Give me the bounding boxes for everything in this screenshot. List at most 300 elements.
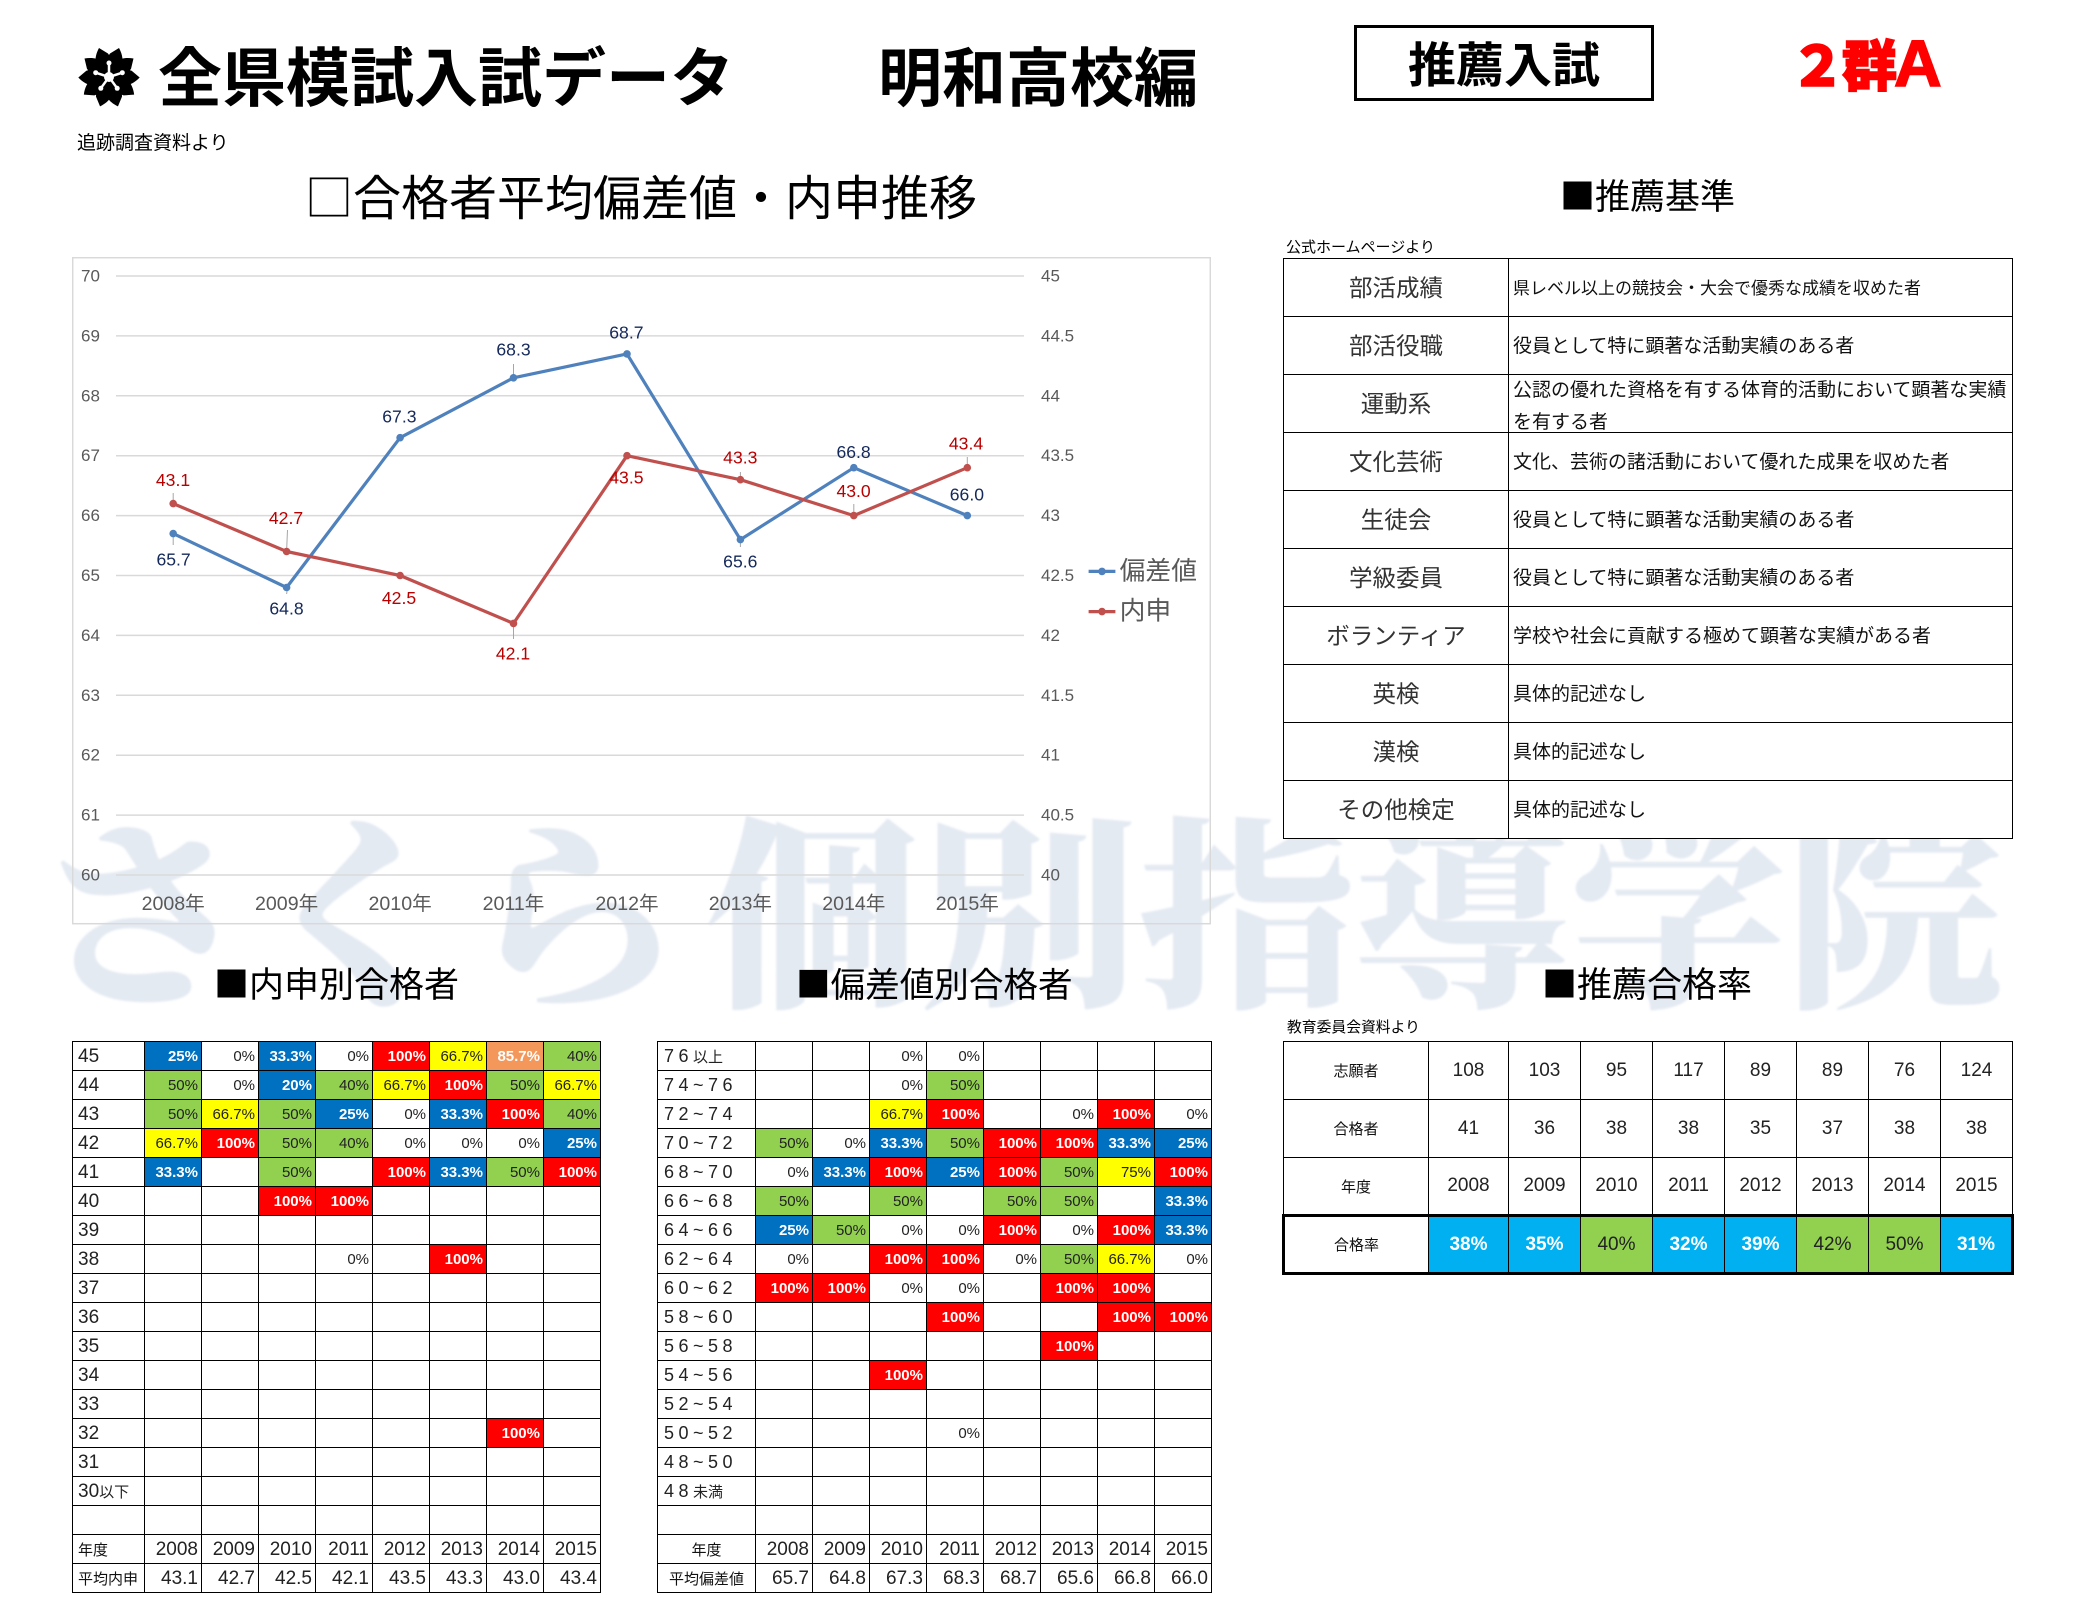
right axis labels: 43: [1041, 506, 1060, 525]
heatmap table: passers by naishin: 50%: [168, 1106, 198, 1122]
heatmap table: passers by deviation: 2009: [824, 1538, 866, 1560]
heatmap table: passers by deviation: 58~60: [664, 1307, 737, 1327]
heatmap table: passers by deviation: 100%: [1170, 1308, 1208, 1326]
heatmap table: passers by naishin: 34: [78, 1364, 99, 1386]
heatmap table: passers by deviation: 100%: [1113, 1222, 1151, 1238]
heatmap table: passers by deviation: 100%: [1056, 1134, 1094, 1152]
data labels: naishin: 43.4: [949, 434, 983, 454]
heatmap table: passers by naishin: 50%: [282, 1134, 312, 1152]
heatmap table: passers by naishin: 66.7%: [440, 1048, 483, 1064]
table: recommendation criteria: 英検: [1372, 675, 1420, 709]
table: recommendation criteria: 県レベル以上の競技会・大会で優秀な成績を収めた者: [1513, 274, 1921, 298]
heatmap table: passers by naishin: 20%: [282, 1076, 312, 1094]
table: recommendation criteria: 文化芸術: [1349, 443, 1443, 477]
table: recommendation criteria: 漢検: [1372, 733, 1420, 767]
heatmap table: passers by naishin: 2008: [156, 1538, 198, 1560]
heatmap table: passers by deviation: 0%: [901, 1048, 923, 1064]
heatmap table: passers by deviation: 62~64: [664, 1249, 737, 1269]
x axis labels: 2008年: [142, 893, 205, 915]
table: recommendation pass rate: 108: [1453, 1060, 1484, 1080]
heatmap table: passers by naishin: 0%: [404, 1134, 426, 1152]
heatmap table: passers by naishin: 0%: [233, 1076, 255, 1094]
heatmap table: passers by deviation: 64~66: [664, 1220, 737, 1240]
heatmap table: passers by deviation: 50%: [950, 1076, 980, 1094]
heatmap table: passers by deviation: 2015: [1166, 1538, 1208, 1560]
table: recommendation criteria: 役員として特に顕著な活動実績のある者: [1513, 562, 1854, 590]
legend: [1089, 556, 1197, 626]
heatmap table: passers by deviation: 65.6: [1057, 1568, 1094, 1588]
heatmap table: passers by naishin: 32: [78, 1422, 99, 1444]
left axis labels: 63: [81, 686, 100, 705]
data labels: deviation value: 68.3: [496, 340, 531, 360]
heatmap table: passers by naishin: 42.5: [275, 1568, 312, 1588]
table: recommendation pass rate: 35: [1750, 1118, 1771, 1138]
heatmap table: passers by naishin: 0%: [461, 1134, 483, 1152]
data labels: naishin: 43.0: [836, 481, 871, 501]
title: school name: 明和高校編: [878, 28, 1198, 120]
heatmap table: passers by naishin: 0%: [233, 1048, 255, 1064]
heatmap table: passers by naishin: 38: [78, 1248, 99, 1270]
heatmap table: passers by naishin: 25%: [339, 1106, 369, 1122]
heatmap table: passers by naishin: 66.7%: [554, 1076, 597, 1094]
heatmap table: passers by naishin: 100%: [502, 1106, 540, 1122]
heatmap table: passers by deviation: 100%: [942, 1308, 980, 1326]
data labels: naishin: 43.5: [609, 468, 644, 488]
heatmap table: passers by deviation: 50%: [1064, 1250, 1094, 1268]
heatmap table: passers by naishin: 0%: [347, 1250, 369, 1268]
heatmap table: passers by naishin: 36: [78, 1306, 99, 1328]
right axis labels: 43.5: [1041, 446, 1074, 465]
heatmap table: passers by deviation: 66.0: [1171, 1568, 1208, 1588]
heatmap table: passers by deviation: 54~56: [664, 1365, 737, 1385]
heatmap table: passers by deviation: 50%: [893, 1192, 923, 1210]
table: recommendation criteria: 具体的記述なし: [1513, 794, 1646, 822]
heatmap table: passers by deviation: 50%: [1064, 1164, 1094, 1180]
table: recommendation pass rate: 95: [1606, 1060, 1627, 1080]
table: recommendation criteria: [1283, 258, 2013, 839]
heading: recommendation pass rate: ■推薦合格率: [1542, 957, 1752, 1008]
right axis labels: 44.5: [1041, 326, 1074, 345]
heatmap table: passers by naishin: 33: [78, 1394, 99, 1414]
source note: official website: 公式ホームページより: [1286, 236, 1435, 257]
heatmap table: passers by deviation: 66.7%: [880, 1106, 923, 1122]
heatmap table: passers by naishin: 44: [78, 1074, 99, 1096]
heatmap table: passers by deviation: 100%: [942, 1106, 980, 1122]
heatmap table: passers by deviation: 0%: [958, 1222, 980, 1238]
heatmap table: passers by naishin: [72, 1041, 601, 1593]
heading: average trend: □合格者平均偏差値・内申推移: [305, 159, 977, 229]
table: recommendation criteria: 部活成績: [1349, 269, 1443, 303]
heatmap table: passers by deviation: 66.7%: [1108, 1250, 1151, 1268]
heatmap table: passers by deviation: 0%: [844, 1134, 866, 1152]
heatmap table: passers by naishin: 40%: [567, 1048, 597, 1064]
table: recommendation pass rate: 2011: [1668, 1175, 1709, 1196]
data labels: naishin: 42.7: [269, 508, 303, 528]
left axis labels: 69: [81, 326, 100, 345]
heatmap table: passers by deviation: 2013: [1052, 1538, 1094, 1560]
heatmap table: passers by naishin: 37: [78, 1278, 99, 1298]
heatmap table: passers by deviation: 2012: [995, 1538, 1037, 1560]
table: recommendation criteria: 文化、芸術の諸活動において優れた成果を収めた者: [1513, 446, 1949, 474]
heatmap table: passers by deviation: 60~62: [664, 1278, 737, 1298]
heatmap table: passers by deviation: 0%: [901, 1076, 923, 1094]
heatmap table: passers by deviation: 33.3%: [823, 1164, 866, 1180]
data labels: deviation value: 66.0: [950, 485, 984, 505]
heatmap table: passers by deviation: 0%: [901, 1280, 923, 1296]
table: recommendation pass rate: 2010: [1595, 1175, 1638, 1196]
heatmap table: passers by naishin: 2012: [384, 1538, 426, 1560]
heatmap table: passers by naishin: 33.3%: [440, 1164, 483, 1180]
left axis labels: 60: [81, 866, 100, 884]
heatmap table: passers by naishin: 100%: [274, 1192, 312, 1210]
heatmap table: passers by deviation: 0%: [958, 1048, 980, 1064]
right axis labels: 40: [1041, 866, 1060, 884]
table: recommendation pass rate: 38: [1966, 1118, 1987, 1138]
table: recommendation pass rate: [1282, 1041, 2014, 1275]
x axis labels: 2015年: [936, 893, 999, 915]
heatmap table: passers by naishin: 100%: [388, 1164, 426, 1180]
heatmap table: passers by deviation: 0%: [787, 1250, 809, 1268]
left axis labels: 64: [81, 626, 100, 645]
heatmap table: passers by deviation: 2014: [1109, 1538, 1151, 1560]
heatmap table: passers by naishin: 40: [78, 1190, 99, 1212]
heatmap table: passers by naishin: 66.7%: [155, 1134, 198, 1152]
table: recommendation pass rate: 2008: [1447, 1175, 1490, 1196]
right axis labels: 42: [1041, 626, 1060, 645]
x axis labels: 2011年: [483, 893, 544, 915]
heatmap table: passers by deviation: 100%: [885, 1250, 923, 1268]
heatmap table: passers by deviation: 48~50: [664, 1452, 737, 1472]
table: recommendation pass rate: 年度: [1341, 1176, 1371, 1196]
right axis labels: 41: [1041, 746, 1060, 765]
data labels: naishin: 43.1: [156, 470, 190, 490]
heatmap table: passers by naishin: 45: [78, 1046, 99, 1066]
heatmap table: passers by naishin: 50%: [282, 1164, 312, 1180]
heatmap table: passers by naishin: 43.4: [560, 1568, 597, 1588]
heatmap table: passers by deviation: 0%: [958, 1280, 980, 1296]
left axis labels: 66: [81, 506, 100, 525]
heatmap table: passers by deviation: 48未満: [664, 1481, 723, 1502]
heatmap table: passers by deviation: 50%: [836, 1222, 866, 1238]
heatmap table: passers by deviation: 76以上: [664, 1046, 723, 1067]
heatmap table: passers by deviation: 年度: [691, 1538, 722, 1560]
data labels: deviation value: [156, 323, 984, 618]
heatmap table: passers by deviation: 56~58: [664, 1336, 737, 1356]
table: recommendation pass rate: 38%: [1449, 1234, 1488, 1254]
table: recommendation pass rate: 42%: [1813, 1234, 1852, 1254]
data labels: naishin: 42.5: [382, 588, 416, 608]
table: recommendation criteria: 公認の優れた資格を有する体育的活動において顕著な実績: [1513, 374, 2006, 402]
table: recommendation pass rate: 89: [1822, 1060, 1843, 1080]
heatmap table: passers by deviation: 100%: [885, 1164, 923, 1180]
right axis labels: 42.5: [1041, 566, 1074, 585]
heatmap table: passers by deviation: 66.8: [1114, 1568, 1151, 1588]
heatmap table: passers by deviation: 67.3: [886, 1568, 923, 1588]
heatmap table: passers by naishin: 50%: [282, 1106, 312, 1122]
data labels: deviation value: 65.7: [156, 549, 191, 569]
legend: 内申: [1120, 597, 1171, 626]
heatmap table: passers by deviation: 50%: [1064, 1192, 1094, 1210]
heatmap table: passers by naishin: 0%: [518, 1134, 540, 1152]
heatmap table: passers by naishin: 0%: [404, 1106, 426, 1122]
table: recommendation pass rate: 41: [1458, 1118, 1479, 1138]
heatmap table: passers by naishin: 100%: [388, 1048, 426, 1064]
heatmap table: passers by naishin: 40%: [339, 1076, 369, 1094]
line chart: average deviation and naishin trend: [72, 257, 1211, 924]
title: 全県模試入試データ: [158, 28, 734, 120]
heatmap table: passers by deviation: 100%: [1113, 1280, 1151, 1296]
heatmap table: passers by deviation: 72~74: [664, 1104, 737, 1124]
table: recommendation pass rate: 2009: [1523, 1175, 1566, 1196]
left axis labels: 62: [81, 746, 100, 765]
table: recommendation criteria: 学校や社会に貢献する極めて顕著な実績がある者: [1513, 620, 1931, 648]
heatmap table: passers by deviation: 75%: [1121, 1164, 1151, 1180]
heatmap table: passers by naishin: 42: [78, 1132, 99, 1154]
series: deviation value: [169, 350, 971, 591]
badge: exam type: [1354, 25, 1654, 101]
heatmap table: passers by naishin: 25%: [168, 1048, 198, 1064]
heatmap table: passers by naishin: 42.7: [218, 1568, 255, 1588]
left axis labels: [81, 266, 100, 884]
table: recommendation pass rate: 38: [1894, 1118, 1915, 1138]
right axis labels: 44: [1041, 386, 1060, 405]
table: recommendation criteria: 役員として特に顕著な活動実績のある者: [1513, 504, 1854, 532]
watermark: さくら個別指導学院: [34, 754, 2002, 1050]
heatmap table: passers by naishin: 2013: [441, 1538, 483, 1560]
table: recommendation pass rate: 2015: [1955, 1175, 1998, 1196]
left axis labels: 65: [81, 566, 100, 585]
heatmap table: passers by naishin: 100%: [331, 1192, 369, 1210]
left axis labels: 70: [81, 266, 100, 286]
table: recommendation pass rate: 76: [1894, 1060, 1915, 1080]
heatmap table: passers by deviation: 52~54: [664, 1394, 737, 1414]
heatmap table: passers by deviation: 25%: [1178, 1134, 1208, 1152]
heatmap table: passers by naishin: 40%: [339, 1134, 369, 1152]
heatmap table: passers by deviation: 33.3%: [1108, 1134, 1151, 1152]
heatmap table: passers by naishin: 43.1: [161, 1568, 198, 1588]
heading: passers by deviation: ■偏差値別合格者: [796, 957, 1073, 1007]
data labels: deviation value: 65.6: [723, 552, 758, 572]
x axis labels: 2013年: [709, 893, 772, 915]
table: recommendation pass rate: 2014: [1883, 1175, 1926, 1196]
heatmap table: passers by deviation: 70~72: [664, 1133, 737, 1153]
heatmap table: passers by deviation: 100%: [1113, 1308, 1151, 1326]
heatmap table: passers by naishin: 2014: [498, 1538, 540, 1560]
heatmap table: passers by deviation: 50%: [779, 1192, 809, 1210]
heatmap table: passers by naishin: 33.3%: [269, 1048, 312, 1064]
table: recommendation pass rate: 31%: [1957, 1234, 1995, 1254]
icon: sakura flower: [78, 48, 140, 106]
table: recommendation criteria: 運動系: [1361, 385, 1431, 419]
table: recommendation pass rate: 38: [1606, 1118, 1627, 1138]
table: recommendation criteria: 具体的記述なし: [1513, 736, 1646, 764]
table: recommendation criteria: その他検定: [1337, 791, 1455, 825]
table: recommendation pass rate: 32%: [1669, 1234, 1708, 1254]
table: recommendation criteria: 役員として特に顕著な活動実績のある者: [1513, 330, 1854, 358]
heatmap table: passers by naishin: 31: [78, 1452, 99, 1472]
left axis labels: 61: [81, 806, 100, 825]
legend: 偏差値: [1120, 556, 1197, 585]
heatmap table: passers by naishin: 0%: [347, 1048, 369, 1064]
x axis labels: 2009年: [255, 893, 318, 915]
data labels: naishin: [156, 434, 983, 664]
heatmap table: passers by deviation: 50%: [950, 1134, 980, 1152]
source note: board of education: 教育委員会資料より: [1287, 1016, 1420, 1037]
heatmap table: passers by deviation: 74~76: [664, 1075, 737, 1095]
heatmap table: passers by deviation: 33.3%: [1165, 1222, 1208, 1238]
heatmap table: passers by naishin: 42.1: [332, 1568, 369, 1588]
heatmap table: passers by deviation: 68.3: [943, 1568, 980, 1588]
table: recommendation pass rate: 2012: [1739, 1175, 1782, 1196]
heatmap table: passers by deviation: 33.3%: [1165, 1192, 1208, 1210]
left axis labels: 68: [81, 386, 100, 405]
table: recommendation criteria: 生徒会: [1361, 501, 1431, 535]
heatmap table: passers by deviation: 68~70: [664, 1162, 737, 1182]
heatmap table: passers by naishin: 100%: [217, 1134, 255, 1152]
heatmap table: passers by deviation: 2011: [939, 1538, 980, 1560]
heatmap table: passers by naishin: 50%: [510, 1164, 540, 1180]
heatmap table: passers by deviation: 68.7: [1000, 1568, 1037, 1588]
heatmap table: passers by deviation: 0%: [958, 1424, 980, 1442]
heatmap table: passers by deviation: 100%: [1056, 1280, 1094, 1296]
heatmap table: passers by naishin: 100%: [502, 1424, 540, 1442]
table: recommendation pass rate: 39%: [1741, 1234, 1780, 1254]
heatmap table: passers by naishin: 50%: [510, 1076, 540, 1094]
right axis labels: 40.5: [1041, 806, 1074, 825]
heatmap table: passers by naishin: 66.7%: [383, 1076, 426, 1094]
heatmap table: passers by naishin: 30以下: [78, 1480, 129, 1502]
heatmap table: passers by deviation: 0%: [1072, 1106, 1094, 1122]
heatmap table: passers by deviation: 0%: [1015, 1250, 1037, 1268]
heatmap table: passers by deviation: 2010: [881, 1538, 923, 1560]
heatmap table: passers by deviation: 0%: [787, 1164, 809, 1180]
heatmap table: passers by deviation: 50%: [779, 1134, 809, 1152]
heatmap table: passers by deviation: 0%: [1072, 1222, 1094, 1238]
heatmap table: passers by naishin: 35: [78, 1336, 99, 1356]
series: naishin: [169, 452, 971, 627]
table: recommendation criteria: 学級委員: [1349, 559, 1443, 593]
right axis labels: [1041, 266, 1074, 884]
heatmap table: passers by deviation: 65.7: [772, 1568, 809, 1588]
right axis labels: 45: [1041, 266, 1060, 286]
heatmap table: passers by deviation: 100%: [999, 1164, 1037, 1180]
heatmap table: passers by naishin: 33.3%: [440, 1106, 483, 1122]
x axis labels: 2012年: [595, 893, 659, 915]
heatmap table: passers by deviation: 100%: [1170, 1164, 1208, 1180]
heatmap table: passers by naishin: 平均内申: [78, 1568, 138, 1588]
data labels: deviation value: 64.8: [269, 598, 304, 618]
heatmap table: passers by naishin: 33.3%: [155, 1164, 198, 1180]
heatmap table: passers by naishin: 年度: [78, 1538, 108, 1560]
left axis labels: 67: [81, 446, 100, 465]
heatmap table: passers by deviation: 66~68: [664, 1191, 737, 1211]
heatmap table: passers by deviation: 0%: [1186, 1106, 1208, 1122]
badge: group label: ２群A: [1790, 22, 1939, 102]
table: recommendation pass rate: 2013: [1811, 1175, 1854, 1196]
heatmap table: passers by naishin: 39: [78, 1220, 99, 1240]
heatmap table: passers by deviation: 0%: [1186, 1250, 1208, 1268]
table: recommendation pass rate: 124: [1961, 1060, 1992, 1080]
heatmap table: passers by deviation: 100%: [1056, 1338, 1094, 1354]
heatmap table: passers by deviation: 25%: [779, 1222, 809, 1238]
heatmap table: passers by naishin: 43.3: [446, 1568, 483, 1588]
heatmap table: passers by naishin: 100%: [445, 1076, 483, 1094]
source note: tracking survey: 追跡調査資料より: [77, 128, 229, 155]
heatmap table: passers by naishin: 100%: [559, 1164, 597, 1180]
badge: exam type: 推薦入試: [1408, 26, 1600, 96]
heatmap table: passers by deviation: 平均偏差値: [669, 1568, 744, 1588]
table: recommendation pass rate: 89: [1750, 1060, 1771, 1080]
heatmap table: passers by deviation: 100%: [885, 1366, 923, 1384]
data labels: deviation value: 67.3: [382, 406, 417, 426]
heatmap table: passers by naishin: 43: [78, 1104, 99, 1124]
heatmap table: passers by naishin: 2010: [270, 1538, 312, 1560]
table: recommendation pass rate: 50%: [1885, 1234, 1924, 1254]
table: recommendation pass rate: 38: [1678, 1118, 1699, 1138]
heatmap table: passers by naishin: 40%: [567, 1106, 597, 1122]
table: recommendation criteria: ボランティア: [1326, 617, 1466, 651]
heatmap table: passers by naishin: 85.7%: [497, 1048, 540, 1064]
heatmap table: passers by naishin: 41: [78, 1162, 99, 1182]
table: recommendation pass rate: 103: [1529, 1060, 1560, 1080]
table: recommendation criteria: 部活役職: [1349, 327, 1443, 361]
x axis labels: 2014年: [822, 893, 885, 915]
x axis labels: 2010年: [369, 893, 432, 915]
heatmap table: passers by naishin: 43.0: [503, 1568, 540, 1588]
heatmap table: passers by deviation: 100%: [942, 1250, 980, 1268]
table: recommendation pass rate: 志願者: [1333, 1060, 1378, 1081]
heatmap table: passers by deviation: 50%: [1007, 1192, 1037, 1210]
heatmap table: passers by naishin: 66.7%: [212, 1106, 255, 1122]
heatmap table: passers by deviation: 50~52: [664, 1423, 737, 1443]
heatmap table: passers by deviation: 64.8: [829, 1568, 866, 1588]
table: recommendation pass rate: 37: [1822, 1118, 1843, 1138]
table: recommendation pass rate: 35%: [1525, 1234, 1564, 1254]
heatmap table: passers by naishin: 50%: [168, 1076, 198, 1094]
heatmap table: passers by deviation: 100%: [828, 1280, 866, 1296]
heading: recommendation criteria: ■推薦基準: [1560, 169, 1735, 220]
heatmap table: passers by deviation: 100%: [999, 1134, 1037, 1152]
heatmap table: passers by deviation: [657, 1041, 1212, 1593]
table: recommendation pass rate: 合格率: [1334, 1234, 1379, 1255]
heatmap table: passers by deviation: 25%: [950, 1164, 980, 1180]
heatmap table: passers by naishin: 100%: [445, 1250, 483, 1268]
heatmap table: passers by deviation: 33.3%: [880, 1134, 923, 1152]
heatmap table: passers by deviation: 100%: [1113, 1106, 1151, 1122]
table: recommendation pass rate: 合格者: [1333, 1118, 1378, 1139]
heatmap table: passers by naishin: 43.5: [389, 1568, 426, 1588]
heading: passers by naishin: ■内申別合格者: [214, 957, 459, 1008]
heatmap table: passers by deviation: 2008: [767, 1538, 809, 1560]
heatmap table: passers by naishin: 25%: [567, 1134, 597, 1152]
data labels: naishin: 43.3: [723, 448, 758, 468]
x axis labels: [142, 893, 999, 915]
heatmap table: passers by deviation: 0%: [901, 1222, 923, 1238]
right axis labels: 41.5: [1041, 686, 1074, 705]
heatmap table: passers by deviation: 100%: [771, 1280, 809, 1296]
heatmap table: passers by naishin: 2015: [555, 1538, 597, 1560]
heatmap table: passers by naishin: 2009: [213, 1538, 255, 1560]
heatmap table: passers by deviation: 100%: [999, 1222, 1037, 1238]
table: recommendation criteria: 具体的記述なし: [1513, 678, 1646, 706]
table: recommendation pass rate: 117: [1673, 1060, 1704, 1080]
table: recommendation pass rate: 36: [1534, 1118, 1555, 1138]
data labels: deviation value: 66.8: [836, 442, 871, 462]
table: recommendation pass rate: 40%: [1597, 1234, 1636, 1254]
data labels: naishin: 42.1: [496, 644, 530, 664]
heatmap table: passers by naishin: 2011: [328, 1538, 369, 1560]
data labels: deviation value: 68.7: [609, 323, 644, 343]
